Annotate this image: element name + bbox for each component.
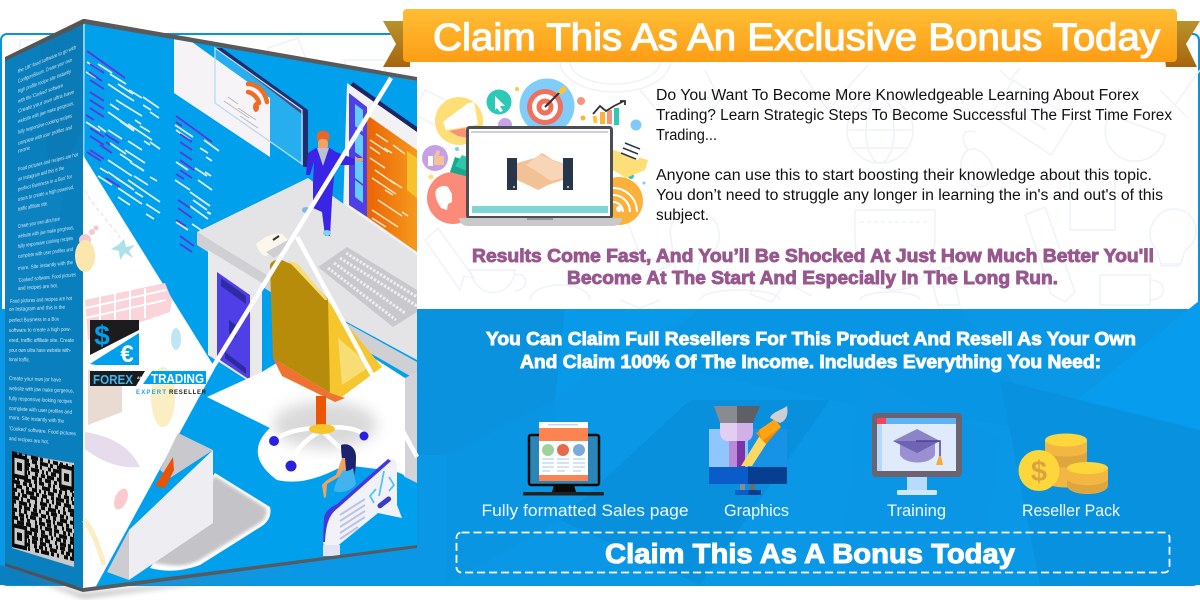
spine text: fully responsive cooking recipes (18, 236, 73, 250)
desk (197, 178, 417, 483)
logo: forex and trading: € (120, 341, 134, 368)
heading: results statement: Results Come Fast, And You’ll Be Shocked At Just How Much Better You'll (472, 245, 1154, 266)
button: claim bonus (456, 532, 1170, 572)
labels: included items: Reseller Pack (1022, 501, 1120, 520)
wall screen with wifi (174, 39, 308, 167)
text block: intro: Do You Want To Become More Knowledgeable Learning About Forex (656, 87, 1139, 104)
banner ribbon (383, 9, 1200, 67)
panel: product box (5, 19, 417, 598)
icon: small dots (428, 87, 646, 184)
box drop shadow (5, 568, 300, 598)
spine text: Food pictures and recipes are hot (18, 152, 78, 173)
spine text: and recipes are hot. (9, 436, 49, 446)
logo: forex and trading: RESELLER (169, 390, 207, 396)
heading: reseller statement: And Claim 100% Of The Income. Includes Everything You Need: (520, 351, 1101, 372)
icon: rss (595, 177, 643, 225)
spine text: high profile recipe site instantly (18, 69, 71, 95)
labels: included items: Training (887, 501, 946, 520)
labels: included items: Fully formatted Sales page (482, 501, 688, 520)
icon: banknotes (450, 155, 494, 182)
spine text: complete with user profiles and (9, 406, 72, 416)
spine text: website with jaw make gorgeous, (8, 386, 74, 395)
QR code (12, 453, 74, 567)
spine text: your own ultra have website with- (9, 348, 71, 354)
man figure (302, 130, 363, 236)
spine text: and recipes are hot. (18, 283, 58, 292)
spine text: on Instagram and this is the (9, 305, 65, 313)
text block: intro: Trading? Learn Strategic Steps To Become Successful The First Time Forex (656, 107, 1172, 124)
spine text: on Instagram and this is the (18, 166, 64, 183)
text block: intro: You don’t need to struggle any longer in learning the in's and out's of this (656, 187, 1163, 204)
icon: thumbs up (422, 145, 448, 171)
heading: reseller statement: You Can Claim Full Resellers For This Product And Resell As Your Own (486, 328, 1136, 349)
logo: forex and trading (90, 320, 207, 396)
icon: training (872, 413, 962, 495)
icon: coins: $ (1031, 456, 1047, 488)
icon: rising chart (593, 101, 625, 125)
spine text: users to create a high powered, (18, 185, 74, 203)
monitor (343, 82, 417, 263)
spine text: more (18, 145, 30, 155)
heading: results statement (472, 245, 1154, 288)
spine text: Create your own jor have (9, 376, 61, 384)
box front face (75, 19, 417, 592)
heading: reseller statement (486, 328, 1136, 372)
icon: megaphone (435, 97, 483, 145)
spine text: more. Site instantly with the (9, 415, 64, 425)
spine text: traffic affiliate site. (18, 201, 48, 213)
icon: graphics (709, 406, 787, 495)
white diagonal section (83, 155, 215, 588)
logo: forex and trading: FOREX (93, 373, 134, 387)
white diagonal stripes (213, 78, 417, 457)
spine text: ered, traffic affiliate site. Create (9, 338, 74, 344)
icon: coral profile (427, 172, 479, 224)
box spine (5, 19, 86, 592)
keyboard (318, 247, 417, 327)
spine text: complete with user profiles and (18, 125, 72, 147)
illustration: laptop with marketing icons (422, 78, 648, 226)
logo: forex and trading: $ (94, 320, 110, 351)
chair (269, 260, 382, 472)
logo: forex and trading: TRADING (151, 372, 204, 386)
spine text: perfect Business in a Box (9, 316, 59, 324)
icon: sales page (523, 422, 604, 496)
spine text: 'Cooked' software. Food pictures (18, 272, 76, 284)
icon: cursor (486, 90, 512, 114)
spine text: fully responsive cooking recipes (18, 113, 72, 136)
crate (107, 433, 271, 580)
spine text: fully responsive looking recipes (9, 396, 72, 405)
spine text: 'Cooked' software. Food pictures (9, 426, 76, 437)
spine text: the UK' food software to go with (18, 45, 76, 75)
box top and bottom edges (83, 19, 417, 592)
icon: envelope (613, 136, 648, 178)
spine text: website with jaw make gorgeous, (17, 101, 74, 125)
spine text: tonal traffic. (9, 357, 30, 363)
pale map decorations (75, 190, 181, 565)
labels: included items: Graphics (724, 501, 789, 520)
spine text: complete with user profiles and (18, 247, 73, 260)
spine text: Create your own ultra have (18, 216, 60, 230)
text block: intro: Anyone can use this to start boosting their knowledge about this topic. (656, 167, 1152, 184)
floor white area with chair shadow (207, 330, 405, 482)
icon: target (520, 78, 574, 134)
spine text: ConfigureBloom. Create your own (18, 58, 72, 85)
panel: blue lower section (0, 300, 1200, 585)
logo: forex and trading: AND (137, 375, 146, 380)
spine text: Create your own ultra have (18, 90, 74, 115)
spine text: website with jaw make gorgeous, (17, 225, 74, 240)
text block: intro: Trading... (656, 127, 717, 144)
background doodle pattern (20, 38, 1200, 308)
heading: results statement: Become At The Start And Especially In The Long Run. (567, 267, 1058, 288)
spine text: perfect Business in a Box' for (18, 174, 72, 193)
labels: included items (482, 501, 1120, 520)
button: claim bonus: Claim This As A Bonus Today (605, 538, 1015, 569)
title: Claim This As An Exclusive Bonus Today (433, 17, 1160, 59)
spine text: more. Site instantly with the (18, 260, 73, 272)
logo: forex and trading: EXPERT (136, 390, 166, 396)
girl and speech bubble (322, 444, 402, 556)
spine text: software to create a high pow- (9, 327, 71, 334)
spine text (8, 45, 78, 446)
text block: intro: subject. (656, 207, 709, 224)
text block: intro (656, 87, 1172, 224)
mouse (256, 233, 292, 258)
code lines (86, 51, 219, 252)
spine text: with the 'Cooked' software (17, 83, 63, 105)
icon: handshake (507, 153, 573, 190)
icon: laptop (459, 128, 622, 226)
spine text: Food pictures and recipes are hot (10, 296, 72, 305)
icon: coins (1018, 434, 1108, 494)
